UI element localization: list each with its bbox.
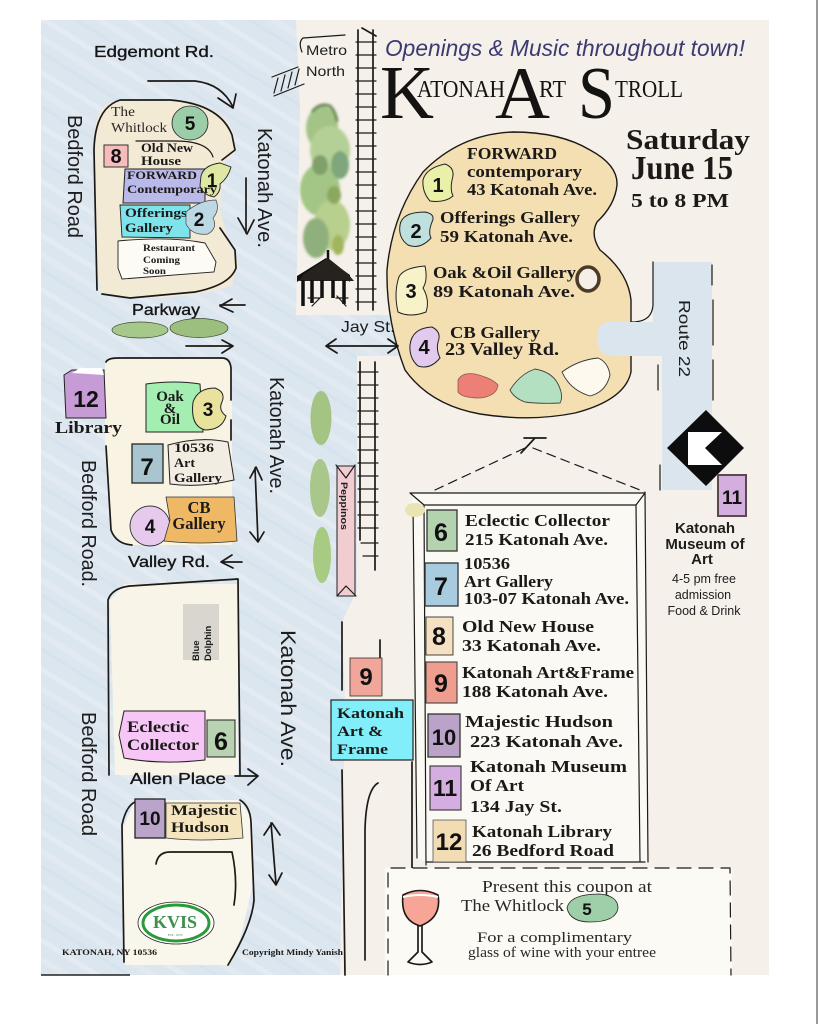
number 8: 8 — [110, 146, 122, 168]
text: Katonah Museum of Art: admission — [675, 588, 731, 602]
panel: gallery list — [405, 492, 648, 865]
coupon offer — [468, 930, 656, 961]
trees beside rail — [300, 105, 350, 258]
number 6: 6 — [214, 728, 228, 756]
Offerings Gallery shop: Gallery — [125, 220, 174, 235]
label: Jay St.: Jay St. — [341, 319, 395, 336]
Eclectic Collector shop: Collector — [127, 737, 199, 754]
stop 10 — [428, 712, 623, 757]
number 9: 9 — [359, 664, 373, 691]
CB Gallery shop: CB — [188, 498, 210, 517]
Katonah Art & Frame shop: Art & — [337, 724, 383, 740]
number 4: 4 — [145, 517, 156, 538]
paint dabs — [458, 358, 610, 403]
number 3: 3 — [203, 400, 213, 421]
stop 1: 43 Katonah Ave. — [467, 180, 597, 199]
arrow: two-way south — [264, 823, 282, 885]
stop 10: Majestic Hudson — [465, 712, 614, 731]
Katonah Art & Frame shop: Katonah — [337, 706, 405, 722]
date and time — [626, 125, 750, 212]
label: Katonah Ave. south: Katonah Ave. — [276, 630, 299, 767]
arrow: curved from Edgemont — [148, 81, 236, 108]
stop 8: Old New House — [462, 617, 595, 636]
stop 2: Offerings Gallery — [440, 208, 581, 227]
page edge rule — [41, 974, 130, 976]
stop 11: Of Art — [470, 776, 524, 795]
icon: train bridge — [272, 35, 345, 96]
stop 10: 10 — [432, 725, 456, 750]
stop 2: 2 — [410, 221, 422, 243]
Eclectic Collector shop — [119, 711, 205, 762]
title: S — [578, 53, 615, 135]
Majestic Hudson shop: Hudson — [171, 820, 230, 836]
Majestic Hudson shop: Majestic — [171, 803, 237, 819]
number 10: 10 — [139, 809, 161, 830]
Blue Dolphin building: Dolphin — [203, 625, 214, 661]
number 6 — [207, 720, 235, 757]
street network — [41, 20, 713, 975]
stop 12: 26 Bedford Road — [472, 841, 615, 860]
title: TROLL — [615, 77, 683, 103]
stop 6: 215 Katonah Ave. — [465, 530, 608, 549]
stop 9: 9 — [434, 670, 448, 698]
stop 3 — [396, 263, 577, 315]
number 5 — [172, 106, 208, 140]
shrubs along Peppinos — [310, 391, 332, 583]
title: A — [495, 53, 550, 135]
coupon offer: For a complimentary — [477, 930, 633, 946]
Restaurant Coming Soon: Coming — [143, 256, 180, 266]
stop 8: 8 — [432, 623, 446, 651]
arrow: Jay St. two-way — [326, 339, 398, 353]
stop 3: Oak &Oil Gallery — [433, 263, 577, 282]
block: far south — [122, 800, 254, 965]
CB Gallery shop — [164, 497, 237, 543]
stop 10: 223 Katonah Ave. — [470, 732, 623, 751]
label: The Whitlock: Whitlock — [111, 121, 167, 136]
number 8 — [104, 145, 128, 168]
label: The Whitlock — [111, 105, 167, 136]
Blue Dolphin building — [183, 604, 219, 661]
10536 Art Gallery shop — [168, 440, 234, 485]
Oak & Oil shop — [146, 382, 203, 432]
railroad and road lanes — [342, 28, 412, 975]
label: Old New House — [136, 140, 213, 168]
label: The Whitlock: The — [111, 105, 135, 120]
number 2: 2 — [194, 210, 204, 231]
stop 7: 10536 — [464, 554, 510, 573]
text: Katonah Museum of Art: Food & Drink — [668, 604, 741, 618]
stop 1 — [423, 144, 597, 201]
middle block shops — [55, 368, 356, 661]
arrow: south on Katonah — [238, 178, 254, 234]
Peppinos strip: Peppinos — [338, 482, 349, 530]
Offerings Gallery shop — [120, 205, 190, 238]
logo: KVIS — [138, 902, 214, 944]
label: Parkway: Parkway — [132, 302, 200, 319]
label: Metro: Metro — [306, 42, 347, 58]
stop 7: Art Gallery — [464, 572, 554, 591]
number 9 — [350, 658, 382, 696]
10536 Art Gallery shop: 10536 — [174, 441, 214, 455]
stop 1: 1 — [432, 175, 444, 197]
label: Edgemont Rd.: Edgemont Rd. — [94, 44, 214, 61]
text: Katonah Museum of Art: 4-5 pm free — [672, 572, 736, 586]
label: Katonah Ave. middle: Katonah Ave. — [265, 377, 287, 494]
number 11 museum — [718, 475, 746, 516]
number 10 — [135, 799, 165, 838]
arrow: Parkway east — [186, 340, 233, 353]
title: RT — [539, 77, 566, 103]
stop 12: 12 — [436, 829, 462, 856]
palette panel — [387, 132, 662, 418]
number 2 — [186, 200, 217, 234]
Restaurant Coming Soon — [118, 239, 216, 279]
stop 2 — [400, 208, 581, 246]
stop 12: Katonah Library — [472, 822, 613, 841]
Oak & Oil shop: Oak — [156, 389, 184, 405]
stop 2: 59 Katonah Ave. — [440, 227, 573, 246]
CB Gallery shop: Gallery — [172, 514, 226, 533]
panel: wine coupon — [385, 868, 732, 975]
coupon card — [385, 868, 732, 975]
Blue Dolphin building: Blue — [191, 640, 202, 661]
stop 6 — [427, 510, 611, 551]
icon: Katonah Museum logo — [667, 410, 744, 486]
tagline: Openings & Music throughout town! — [385, 35, 746, 61]
number 7 — [132, 444, 163, 483]
label: Route 22: Route 22 — [675, 300, 692, 377]
label: Bedford Road south: Bedford Road — [77, 712, 99, 836]
stop 4: 4 — [418, 337, 430, 359]
stop 1: FORWARD — [467, 144, 557, 163]
label: Katonah Ave. north: Katonah Ave. — [253, 128, 275, 248]
stop 6: Eclectic Collector — [465, 511, 611, 530]
date and time: Saturday — [626, 125, 750, 156]
block: north — [94, 100, 238, 298]
Offerings Gallery shop: Offerings — [125, 205, 187, 220]
icon: wine glass — [403, 890, 439, 964]
label: Old New House: Old New — [141, 140, 194, 155]
text: Katonah Museum of Art: Katonah — [675, 520, 735, 537]
label: North: North — [306, 63, 345, 79]
list frame — [412, 493, 648, 862]
number 11 museum: 11 — [722, 488, 742, 509]
south block shops — [62, 630, 413, 957]
number 12 library: 12 — [73, 386, 99, 412]
label: Allen Place: Allen Place — [130, 771, 226, 788]
credit: copyright: Copyright Mindy Yanish — [242, 947, 343, 957]
coupon number 5: 5 — [582, 900, 592, 919]
Katonah Art & Frame shop: Frame — [337, 742, 388, 758]
text: Katonah Museum of Art — [665, 520, 746, 618]
palette shape — [387, 132, 631, 418]
Majestic Hudson shop — [166, 803, 243, 840]
north block shops — [104, 105, 231, 279]
FORWARD Contemporary shop: FORWARD — [127, 168, 197, 182]
logo: KVIS: KVIS — [153, 912, 197, 932]
stop 11: 134 Jay St. — [470, 797, 562, 816]
date and time: June 15 — [631, 150, 733, 187]
stop 6: 6 — [434, 519, 448, 547]
Restaurant Coming Soon: Restaurant — [143, 244, 196, 254]
number 3 — [192, 388, 226, 430]
yellow paint spot — [405, 503, 425, 517]
number 7: 7 — [140, 454, 154, 481]
stop 8: 33 Katonah Ave. — [462, 636, 601, 655]
stop 11 — [430, 757, 627, 816]
stop 8 — [426, 617, 601, 655]
stop 9 — [426, 662, 635, 703]
10536 Art Gallery shop: Gallery — [174, 471, 223, 485]
stop 11: 11 — [433, 775, 457, 801]
arrow: list pointer to palette — [435, 438, 640, 490]
arrow: Allen east — [235, 769, 258, 785]
text: Katonah Museum of Art: Art — [691, 551, 713, 568]
label: Old New House: House — [141, 153, 181, 168]
block: south — [108, 579, 240, 775]
number 1: 1 — [207, 171, 218, 192]
title: ATONAH — [417, 77, 505, 103]
Eclectic Collector shop: Eclectic — [127, 719, 189, 736]
coupon venue: The Whitlock — [461, 896, 565, 915]
top labels — [94, 35, 347, 96]
Peppinos strip — [336, 465, 356, 596]
stop 4: CB Gallery — [450, 323, 541, 342]
arrow: Parkway west — [220, 299, 245, 312]
street labels and arrows — [63, 81, 692, 377]
palette thumb hole — [577, 267, 599, 291]
Oak & Oil shop: & — [164, 401, 176, 417]
logo: KVIS: EST. 1870 — [168, 933, 183, 937]
title: K — [380, 51, 434, 135]
label: Valley Rd.: Valley Rd. — [128, 554, 210, 571]
stop 1: contemporary — [467, 162, 583, 181]
Restaurant Coming Soon: Soon — [143, 267, 167, 277]
coupon offer: glass of wine with your entree — [468, 945, 656, 961]
icon: gazebo — [297, 250, 354, 306]
arrow: Valley west — [221, 555, 242, 568]
stop 7: 7 — [434, 573, 448, 601]
stop 11: Katonah Museum — [470, 757, 627, 776]
label: Bedford Road north: Bedford Road — [63, 115, 85, 238]
10536 Art Gallery shop: Art — [174, 456, 196, 470]
Katonah Art & Frame shop — [331, 700, 413, 760]
parkway shrubs — [112, 318, 228, 338]
stop 4: 23 Valley Rd. — [445, 339, 559, 359]
block: middle — [105, 358, 232, 545]
Route 22 arm over palette — [597, 322, 662, 356]
stop 3: 3 — [405, 281, 417, 303]
label: Library: Library — [55, 418, 123, 437]
label: Bedford Road middle: Bedford Road. — [77, 460, 99, 587]
arrow: two-way middle — [250, 467, 264, 542]
credit: location: KATONAH, NY 10536 — [62, 947, 157, 957]
stop 12 — [433, 820, 615, 862]
number 5: 5 — [185, 114, 196, 135]
stop 7 — [425, 554, 629, 608]
title — [380, 51, 683, 135]
FORWARD Contemporary shop — [123, 163, 231, 203]
coupon number 5 — [567, 894, 618, 922]
stop 4 — [410, 323, 559, 367]
number 4 — [130, 506, 170, 546]
Oak & Oil shop: Oil — [160, 412, 180, 428]
coupon text: Present this coupon at — [482, 877, 652, 896]
stop 7: 103-07 Katonah Ave. — [464, 589, 629, 608]
stop 9: Katonah Art&Frame — [462, 663, 635, 682]
stop 9: 188 Katonah Ave. — [462, 682, 608, 701]
date and time: 5 to 8 PM — [631, 190, 729, 212]
FORWARD Contemporary shop: Contemporary — [127, 182, 217, 196]
stop 3: 89 Katonah Ave. — [433, 282, 575, 301]
number 12 library — [64, 368, 106, 418]
text: Katonah Museum of Art: Museum of — [665, 536, 746, 553]
